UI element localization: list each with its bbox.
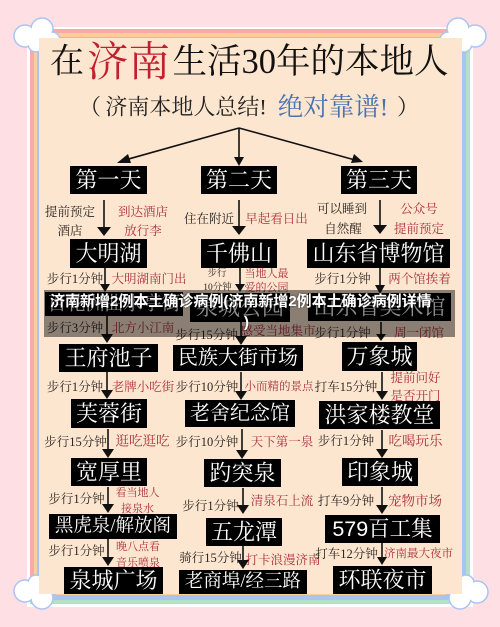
note: 到达酒店放行李 [118,204,168,238]
arrow [235,268,245,292]
arrow [237,488,249,514]
title [50,39,448,85]
arrows: from title to three days [117,128,363,166]
note: 住在附近: 住在附近 [184,212,234,226]
arrow [102,429,114,458]
box: 趵突泉: 趵突泉 [209,460,276,486]
note: 到达酒店放行李: 放行李 [124,223,162,238]
note: 吃喝玩乐: 吃喝玩乐 [388,434,443,448]
box: 老商埠/经三路: 老商埠/经三路 [185,571,301,592]
note: 打卡浪漫济南: 打卡浪漫济南 [245,552,321,567]
subtitle: （ [79,94,101,120]
note: 步行3分钟: 步行3分钟 [47,320,104,335]
note: 步行1分钟: 步行1分钟 [48,543,105,558]
note: 步行10分钟 [203,267,232,293]
note: 晚八点看音乐喷泉 [116,539,160,569]
box: 山东省美术馆: 山东省美术馆 [313,294,446,320]
title: 生活30年的本地人 [172,43,448,81]
arrow [376,322,386,341]
note: 打车15分钟: 打车15分钟 [315,379,378,394]
title: 济南 [87,39,170,85]
arrow [376,372,388,400]
note: 步行10分钟: 步行10分钟 [176,379,239,394]
box: 五龙潭: 五龙潭 [211,520,277,544]
note: 提前预定酒店 [45,204,95,238]
note: 看当地人接泉水: 接泉水 [121,501,154,515]
box: 泉城公园: 泉城公园 [196,295,284,320]
note: 当地人最爱的公园: 爱的公园 [244,281,288,294]
arrow [101,316,113,343]
overlay closing bracket: ) [244,314,249,331]
panel background [39,38,462,594]
box: 第一天: 第一天 [75,168,142,192]
note: 到达酒店放行李: 到达酒店 [118,204,168,219]
arrow [100,268,110,292]
note: 北方小江南: 北方小江南 [112,320,174,335]
arrow [376,430,388,458]
note: 提前问好是否开门: 提前问好 [390,370,441,385]
note: 当地人最爱的公园 [244,266,288,294]
headline overlay band [44,290,455,337]
arrow [237,546,249,569]
note: 步行1分钟: 步行1分钟 [318,433,375,448]
note: 公众号提前预定: 公众号 [400,202,438,216]
arrow [235,372,247,400]
box: 百花洲曲水亭街: 百花洲曲水亭街 [47,292,181,314]
note: 宠物市场: 宠物市场 [388,492,442,508]
note: 济南最大夜市: 济南最大夜市 [384,546,453,560]
day 3 column [307,166,453,594]
cloud: bottom left [14,575,60,609]
note: 早起看日出: 早起看日出 [245,211,308,226]
cloud: bottom right [442,575,488,609]
note: 小而精的景点: 小而精的景点 [244,379,314,393]
note: 老牌小吃街: 老牌小吃街 [112,379,175,394]
note: 感受当地集市: 感受当地集市 [240,323,316,338]
arrow [97,200,111,236]
note: 步行1分钟: 步行1分钟 [314,325,371,340]
note: 大明湖南门出: 大明湖南门出 [111,271,187,286]
box: 环联夜市: 环联夜市 [338,568,427,592]
note: 两个馆挨着: 两个馆挨着 [388,271,451,286]
title: 在 [50,44,84,80]
arrow [102,487,114,513]
box: 王府池子: 王府池子 [64,346,153,370]
box: 第二天: 第二天 [206,168,272,192]
box: 579百工集: 579百工集 [332,517,433,541]
box: 千佛山: 千佛山 [206,241,272,266]
note: 逛吃逛吃: 逛吃逛吃 [116,434,170,448]
box: 印象城: 印象城 [347,460,413,484]
box: 万象城: 万象城 [346,344,413,369]
box: 民族大街市场: 民族大街市场 [178,346,298,369]
box: 宽厚里: 宽厚里 [76,460,142,484]
note: 步行1分钟: 步行1分钟 [48,491,105,506]
box: 山东省博物馆: 山东省博物馆 [312,241,445,266]
subtitle: 绝对靠谱! [278,92,388,122]
box: 大明湖: 大明湖 [75,241,142,266]
arrow [101,372,113,399]
note: 步行1分钟: 步行1分钟 [314,271,371,286]
box: 洪家楼教堂: 洪家楼教堂 [324,402,435,428]
note: 提前问好是否开门: 是否开门 [390,388,441,403]
arrow [373,200,387,234]
day 2 column [173,166,321,594]
note: 提前预定酒店: 酒店 [57,223,83,238]
note: 看当地人接泉水: 看当地人 [116,485,160,499]
box: 黑虎泉/解放阁: 黑虎泉/解放阁 [55,516,171,536]
note: 清泉石上流: 清泉石上流 [251,493,314,508]
arrow [375,268,385,294]
arrow [232,200,246,235]
cloud: top left [14,18,60,52]
subtitle [79,92,419,122]
box: 芙蓉街: 芙蓉街 [76,401,142,426]
note: 步行10分钟: 步行 [207,267,227,279]
note: 当地人最爱的公园: 当地人最 [244,266,288,280]
note: 步行10分钟: 步行10分钟 [176,434,239,449]
cloud: top right [440,18,486,52]
note: 公众号提前预定 [394,202,444,236]
note: 步行15分钟: 步行15分钟 [175,327,238,342]
note: 可以睡到自然醒: 可以睡到 [317,201,367,216]
subtitle: 济南本地人总结! [105,94,267,120]
note: 可以睡到自然醒: 自然醒 [324,222,362,236]
note: 骑行15分钟: 骑行15分钟 [179,550,242,565]
note: 步行10分钟: 10分钟 [203,281,232,293]
box: 泉城广场: 泉城广场 [69,568,158,593]
note: 公众号提前预定: 提前预定 [394,221,444,236]
arrow [102,539,114,566]
note: 步行15分钟: 步行15分钟 [44,434,107,449]
note: 周一闭馆: 周一闭馆 [394,325,444,340]
subtitle: ） [397,94,419,120]
note: 可以睡到自然醒 [317,201,367,236]
arrow [376,487,388,514]
box: 老舍纪念馆: 老舍纪念馆 [190,402,290,424]
note: 步行1分钟: 步行1分钟 [47,379,104,394]
note: 晚八点看音乐喷泉: 音乐喷泉 [116,555,160,569]
note: 天下第一泉: 天下第一泉 [251,435,314,449]
note: 提前预定酒店: 提前预定 [45,204,95,219]
arrow [236,429,248,459]
note: 晚八点看音乐喷泉: 晚八点看 [116,539,160,553]
note: 步行1分钟: 步行1分钟 [47,271,104,286]
note: 打车9分钟: 打车9分钟 [318,493,375,508]
note: 打车12分钟: 打车12分钟 [315,546,378,561]
overlay headline: 济南新增2例本土确诊病例(济南新增2例本土确诊病例详情 [50,293,432,310]
day 1 column [44,166,187,594]
arrow [235,322,247,345]
note: 看当地人接泉水 [116,485,160,515]
arrow [377,543,387,565]
box: 第三天: 第三天 [346,168,412,192]
note: 提前问好是否开门 [390,370,441,403]
note: 步行1分钟: 步行1分钟 [182,498,239,513]
